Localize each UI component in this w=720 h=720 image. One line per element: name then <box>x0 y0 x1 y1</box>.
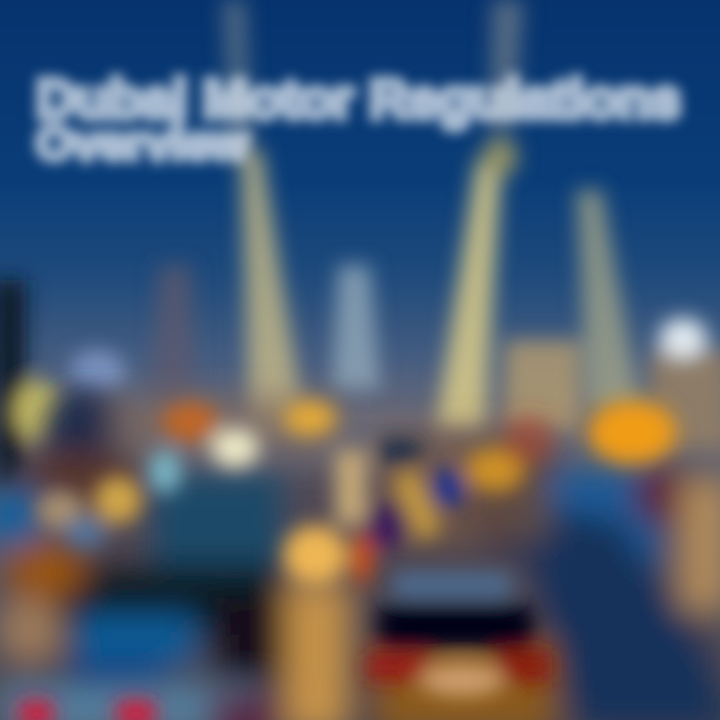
subtitle line: Overview: Overview <box>36 117 248 169</box>
street traffic lights and cars <box>0 388 720 720</box>
title <box>36 67 681 169</box>
title line: Dubai Motor Regulations: Dubai Motor Regulations <box>36 67 681 130</box>
car: rear of orange vehicle <box>18 572 552 720</box>
city skyline towers <box>0 0 720 490</box>
